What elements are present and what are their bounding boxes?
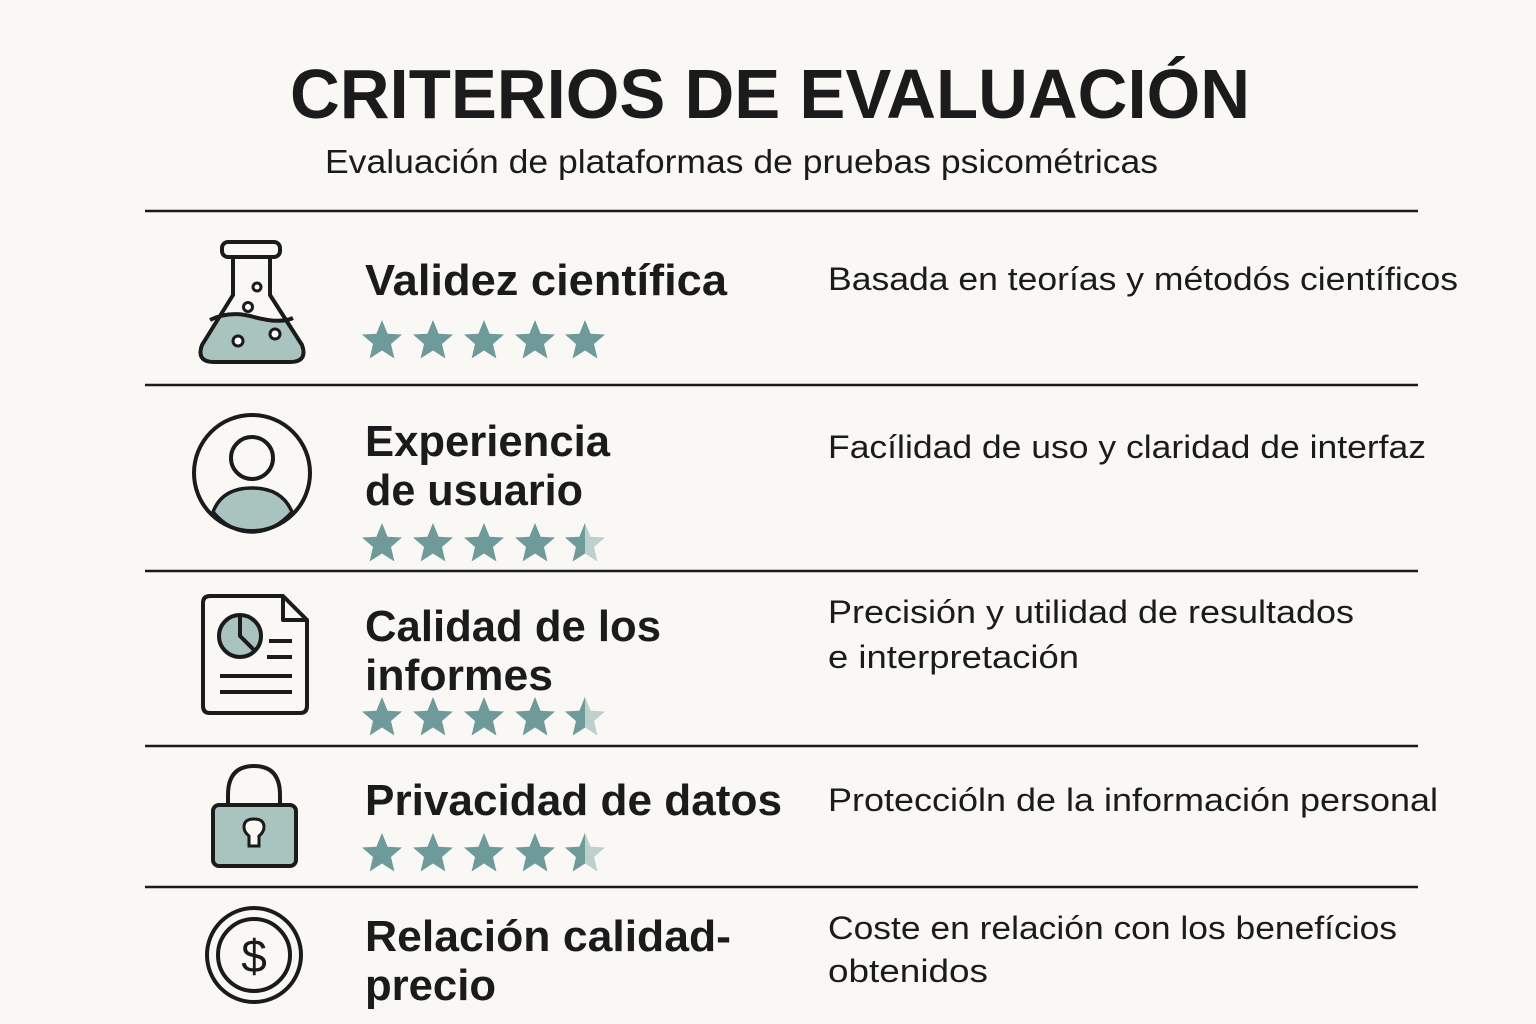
row: privacidad de datos xyxy=(213,766,1438,872)
row: relación calidad-precio: precio xyxy=(365,961,496,1010)
row: experiencia de usuario xyxy=(194,415,1426,562)
row: relación calidad-precio xyxy=(207,908,1397,1010)
row: relación calidad-precio: obtenidos xyxy=(828,953,988,989)
heading: Experiencia xyxy=(365,417,611,466)
icon: coin: $ xyxy=(241,930,267,982)
icon: flask xyxy=(198,240,306,364)
description: Proteccióln de la información personal xyxy=(828,782,1438,818)
description: Basada en teorías y métodós científicos xyxy=(828,261,1458,297)
description: Precisión y utilidad de resultados xyxy=(828,594,1354,630)
row: calidad de los informes xyxy=(203,594,1354,736)
icon: user xyxy=(194,415,310,532)
row: experiencia de usuario: de usuario xyxy=(365,466,583,515)
stars: 5 xyxy=(362,320,605,358)
stars: 4.5 xyxy=(362,833,605,872)
icon: lock xyxy=(213,766,296,866)
description: Coste en relación con los benefícios xyxy=(828,910,1397,946)
icon: report xyxy=(203,596,307,713)
heading: Relación calidad- xyxy=(365,912,731,961)
row: calidad de los informes: informes xyxy=(365,651,553,700)
heading: Validez científica xyxy=(365,256,728,305)
heading: Calidad de los xyxy=(365,602,661,651)
stars: 4.5 xyxy=(362,523,605,562)
description: Facílidad de uso y claridad de interfaz xyxy=(828,429,1426,465)
icon: coin xyxy=(207,908,301,1002)
subtitle: Evaluación de plataformas de pruebas psicométricas xyxy=(325,143,1158,180)
title: CRITERIOS DE EVALUACIÓN xyxy=(290,55,1250,133)
row: calidad de los informes: e interpretación xyxy=(828,639,1079,675)
stars: 4.5 xyxy=(362,697,605,736)
heading: Privacidad de datos xyxy=(365,776,782,825)
row: validez científica xyxy=(190,242,1458,370)
